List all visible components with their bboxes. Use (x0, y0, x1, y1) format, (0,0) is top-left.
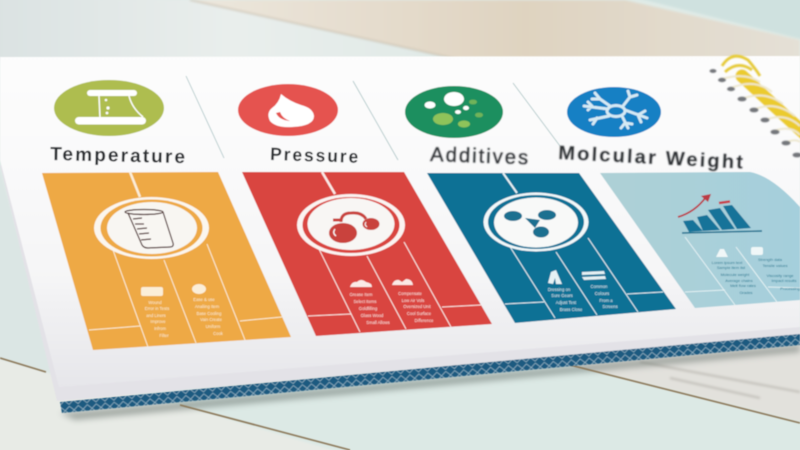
icon: snowflake on blue circle (567, 87, 661, 137)
spiral binding (710, 56, 800, 157)
text column: molecular weight right: Processing (780, 286, 800, 291)
text column: temperature right: Base Cooling (197, 311, 222, 316)
text column: pressure right: Cool Surface (407, 311, 432, 316)
icon: water drop on red circle (238, 84, 338, 136)
text column: molecular weight left: Lorem ipsum text (712, 260, 743, 265)
text column: pressure left: Glass Wood (361, 313, 384, 318)
text column: pressure left (349, 280, 390, 325)
text column: molecular weight left: Average chains (725, 278, 753, 283)
text column: additives left: Dressing on (548, 287, 571, 292)
bar chart with rising arrow (678, 194, 762, 233)
patterned blue back cover (60, 333, 800, 413)
heading: Additives: Additives (430, 144, 531, 169)
text column: additives right: Colours (595, 291, 609, 296)
text column: pressure left: Goldfilling (359, 306, 378, 311)
text column: molecular weight left (712, 249, 756, 295)
text column: temperature left: Wound (148, 300, 162, 305)
text column: molecular weight right: Strength data (758, 257, 783, 262)
text column: pressure left: Small Allows (366, 320, 390, 325)
text column: additives right: Screens (602, 304, 618, 309)
text column: pressure right: Difference (414, 318, 434, 323)
icon: beaker in ring (94, 197, 209, 259)
text column: temperature left: Filter (159, 333, 169, 338)
panel: temperature (42, 172, 291, 350)
text column: temperature left: Improve (150, 319, 166, 324)
notebook (0, 56, 800, 413)
text column: pressure left: Grease Item (349, 292, 373, 297)
text column: additives left: Brass Close (560, 307, 583, 312)
text column: temperature right (192, 284, 224, 336)
text column: pressure right: Low Air Vols (402, 298, 424, 303)
text column: molecular weight left: Molecule weight (721, 272, 750, 277)
panel: pressure (242, 172, 492, 336)
text column: additives right: From a (599, 298, 613, 303)
icon: molecule in ring (484, 192, 588, 252)
text column: temperature right: Vain Create (200, 317, 223, 322)
column dividers (186, 76, 560, 160)
text column: additives left (548, 270, 583, 312)
text column: temperature left: Error in Tests (145, 306, 169, 311)
text column: molecular weight right (751, 247, 800, 291)
lower sheets edge (0, 165, 800, 401)
text column: temperature right: Cook (213, 331, 224, 336)
text column: temperature right: Uniform (206, 324, 221, 329)
text column: pressure right: Oversized Unit (403, 304, 432, 309)
text column: temperature right: Ease & use (193, 297, 215, 302)
icon: bubbles on green circle (405, 86, 503, 138)
text column: pressure right: Compensate (398, 291, 423, 296)
text column: molecular weight left: Melt flow rates (730, 283, 756, 288)
text column: additives right: Common (590, 284, 608, 289)
heading: Molcular Weight: Molcular Weight (558, 143, 746, 174)
text column: temperature left: Infrom (154, 326, 166, 331)
text column: temperature left (141, 287, 169, 338)
icon: flask on green circle (54, 80, 164, 136)
text column: molecular weight left: Grades (739, 290, 753, 295)
text column: temperature right: Analiing Item (195, 304, 220, 309)
white top page (0, 56, 800, 387)
panel: molecular weight (600, 172, 800, 308)
text column: additives left: Sure Gears (551, 293, 573, 298)
text column: molecular weight left: Sample item list (717, 265, 746, 270)
heading: Pressure: Pressure (270, 144, 360, 167)
text column: pressure right (392, 279, 434, 323)
text column: molecular weight right: Tensile values (762, 263, 788, 268)
heading: Temperature: Temperature (50, 144, 187, 168)
text column: additives left: Adjust Test (556, 300, 577, 305)
text column: molecular weight right: Impact results (772, 278, 796, 283)
icon: connected balls in ring (297, 194, 405, 256)
text column: temperature left: and Liners (146, 313, 166, 318)
text column: molecular weight right: Viscosity range (766, 273, 794, 278)
text column: additives right (582, 271, 618, 309)
panel: additives (427, 173, 676, 323)
text column: pressure left: Select Items (353, 299, 377, 304)
